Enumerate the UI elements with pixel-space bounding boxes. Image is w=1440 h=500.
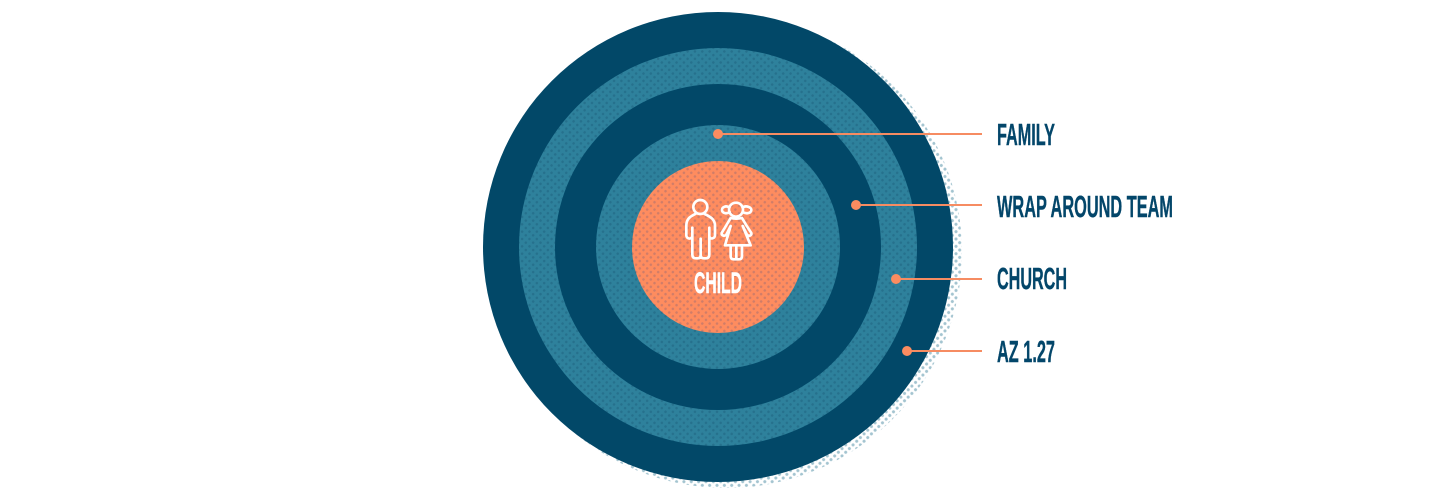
icon: girl xyxy=(722,203,751,259)
callout: church xyxy=(891,261,1067,296)
center circle: child xyxy=(632,161,804,333)
callout: family xyxy=(713,117,1055,152)
callout: wrap around team xyxy=(851,189,1173,224)
callout: wrap around team: WRAP AROUND TEAM xyxy=(997,189,1173,224)
halftone drop shadow xyxy=(490,16,962,488)
ring: wrap around team xyxy=(555,84,881,410)
icon: boy xyxy=(686,200,715,258)
callout: church: CHURCH xyxy=(997,261,1067,296)
label: child: CHILD xyxy=(694,267,742,300)
callout: family: FAMILY xyxy=(997,117,1055,152)
callout: AZ 1.27 xyxy=(902,334,1055,369)
ring: family xyxy=(596,125,840,369)
ring: AZ 1.27 xyxy=(483,12,953,482)
ring: church xyxy=(519,48,917,446)
callout: AZ 1.27: AZ 1.27 xyxy=(997,334,1055,369)
icon: boy and girl figures xyxy=(686,200,751,259)
